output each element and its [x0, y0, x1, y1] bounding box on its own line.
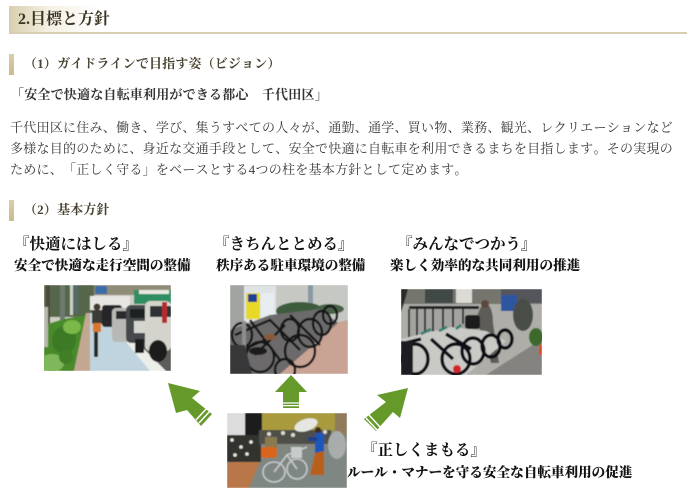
pillar heading: 正しくまもる: 『正しくまもる』: [362, 442, 486, 459]
arrow: up: [275, 375, 307, 408]
arrow: right: [364, 388, 408, 431]
pillar heading: みんなでつかう: 『みんなでつかう』: [397, 236, 537, 253]
photo: shared bicycles: [401, 289, 542, 375]
heading text: 2.目標と方針: [18, 11, 110, 28]
heading bar: [9, 6, 687, 34]
body paragraph: [10, 120, 673, 177]
subheading 1: [9, 54, 281, 75]
pillar caption: 共同利用: 楽しく効率的な共同利用の推進: [390, 258, 580, 273]
subheading 2: （2）基本方針: [24, 202, 110, 217]
pillar heading: 快適にはしる: 『快適にはしる』: [14, 236, 138, 253]
pillar heading: きちんととめる: 『きちんととめる』: [214, 236, 354, 253]
vision statement: 「安全で快適な自転車利用ができる都心 千代田区」: [11, 87, 328, 102]
photo: parked bicycles: [230, 285, 348, 374]
pillar caption: 駐車環境: 秩序ある駐車環境の整備: [216, 258, 366, 273]
subheading 2: [9, 200, 110, 221]
photo: safety class: [227, 413, 347, 488]
arrow: left: [168, 383, 212, 426]
pillar caption: 自転車利用の促進: ルール・マナーを守る安全な自転車利用の促進: [347, 465, 632, 480]
subheading 1: （1）ガイドラインで目指す姿（ビジョン）: [24, 56, 281, 71]
pillar caption: 走行空間: 安全で快適な走行空間の整備: [14, 258, 191, 273]
body paragraph: 多様な目的のために、身近な交通手段として、安全で快適に自転車を利用できるまちを目指します。その実現の: [10, 141, 673, 156]
body paragraph: ために、「正しく守る」をベースとする4つの柱を基本方針として定めます。: [10, 162, 468, 177]
body paragraph: 千代田区に住み、働き、学び、集うすべての人々が、通勤、通学、買い物、業務、観光、レクリエーションなど: [10, 120, 673, 135]
photo: cyclist on blue lane: [44, 285, 171, 371]
